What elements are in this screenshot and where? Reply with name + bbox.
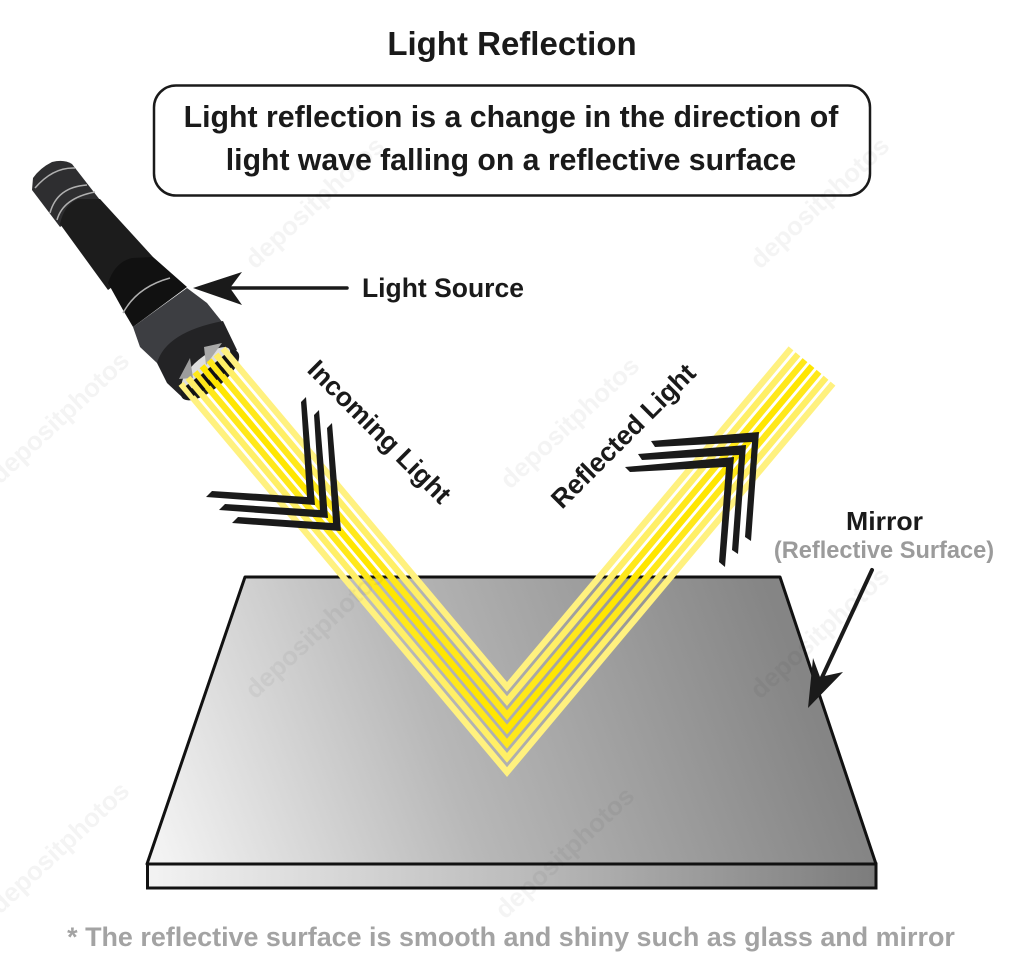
definition box: light wave falling on a reflective surface: [226, 144, 796, 177]
flashlight tail: [32, 161, 100, 227]
mirror arrow: [808, 570, 872, 708]
title: Light Reflection: [387, 25, 637, 62]
reflected light arrow: [625, 432, 759, 567]
watermarks: [0, 130, 895, 924]
flashlight lens: [176, 340, 236, 396]
mirror: [147, 577, 876, 888]
footnote: * The reflective surface is smooth and shiny such as glass and mirror: [67, 922, 955, 952]
reflected light label: Reflected Light: [545, 358, 702, 514]
flashlight body: [60, 199, 153, 290]
definition box: [154, 86, 870, 196]
flashlight collar: [108, 257, 187, 327]
flashlight head: [157, 321, 237, 398]
watermarks: depositphotos: [239, 560, 390, 704]
watermarks: depositphotos: [744, 130, 895, 274]
watermarks: depositphotos: [744, 560, 895, 704]
incoming light label: Incoming Light: [302, 354, 457, 510]
flashlight lens dashes: [187, 356, 232, 395]
mirror label: Mirror: [846, 506, 923, 536]
flashlight: [32, 161, 247, 409]
light source label: Light Source: [362, 273, 524, 303]
incoming light arrow: [206, 397, 341, 531]
flashlight grey section: [133, 288, 223, 363]
watermarks: depositphotos: [239, 130, 390, 274]
reflective surface label: (Reflective Surface): [774, 538, 994, 564]
definition box: Light reflection is a change in the direction of: [184, 101, 839, 134]
watermarks: depositphotos: [494, 350, 645, 494]
watermarks: depositphotos: [489, 780, 640, 924]
light beam: [181, 348, 833, 772]
light source arrow: [193, 272, 347, 305]
